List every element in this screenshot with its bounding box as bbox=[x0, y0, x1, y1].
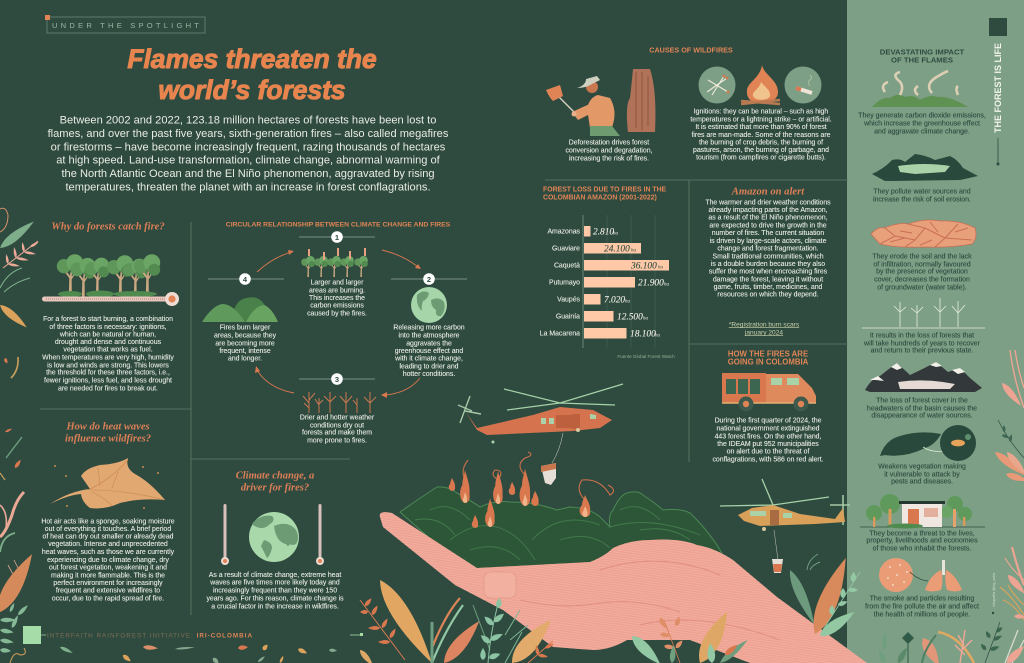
text: amazon on alert: Small traditional communities, which bbox=[712, 253, 824, 260]
text: climate change: increasingly frequent than they were 150 bbox=[213, 588, 337, 594]
text step 1: areas are burning. bbox=[309, 288, 365, 294]
text: amazon on alert: are expected to drive the growth in the bbox=[709, 222, 827, 229]
text: why forests catch fire: of three factors is necessary: ignitions, bbox=[49, 324, 167, 331]
flames and smoke bbox=[449, 452, 614, 528]
bar chart: 7.020 bbox=[604, 296, 625, 306]
text: lives and property: They become a threat to the lives, bbox=[869, 530, 975, 537]
number badge 3: 3 bbox=[335, 375, 339, 384]
text: water sources: increase the risk of soil erosion. bbox=[873, 196, 971, 203]
text: why forests catch fire: is low and winds are strong. This lowers bbox=[47, 362, 169, 369]
icon: particles and lungs bbox=[879, 558, 962, 592]
cycle step 1 bbox=[299, 231, 375, 318]
bar chart: ha bbox=[631, 248, 636, 254]
bar chart: La Macarena bbox=[540, 330, 580, 338]
credit: vertical illustrator note: infografía @ing_sofia bbox=[992, 573, 996, 607]
text step 2: leading to drier and bbox=[400, 363, 459, 370]
section tag: under the spotlight: UNDER THE SPOTLIGHT bbox=[52, 21, 202, 30]
decoration: left lower foliage bbox=[0, 428, 39, 663]
bar chart: 12.500 bbox=[617, 312, 643, 322]
text: amazon on alert: already impacting parts of the Amazon, bbox=[708, 207, 828, 214]
panel: forest is life sidebar bbox=[847, 0, 1024, 663]
text: why forests catch fire: drought and dense and continuous bbox=[55, 339, 162, 346]
bar chart: Guainía bbox=[556, 314, 580, 320]
heading: how the fires are going: HOW THE FIRES ARE bbox=[728, 350, 808, 358]
dividers bbox=[40, 180, 848, 615]
text step 1: Larger and larger bbox=[311, 280, 364, 286]
title: world’s forests bbox=[158, 75, 346, 105]
text: ignitions: temperatures or a lightning strike – or artificial. bbox=[690, 116, 832, 123]
arrow: step 2 to 3 bbox=[381, 378, 420, 398]
text: climate change: As a result of climate change, extreme heat bbox=[209, 572, 341, 579]
text: erode soil: of infiltration, normally favoured bbox=[873, 261, 971, 268]
text: loss of forests: It results in the loss of forests that bbox=[870, 332, 974, 339]
text: why forests catch fire: fewer ignitions, less fuel, and less drought bbox=[44, 377, 172, 384]
text: carbon emissions: They generate carbon dioxide emissions, bbox=[858, 112, 986, 119]
text: climate change: a crucial factor in the increase in wildfires. bbox=[211, 603, 339, 610]
bar chart: Caquetá bbox=[554, 262, 580, 270]
cycle step 3 bbox=[299, 373, 376, 444]
text: erode soil: of groundwater (water table). bbox=[877, 284, 967, 291]
heading: how do heat waves influence wildfires: influence wildfires? bbox=[65, 434, 151, 444]
text: climate change: waves are five times more likely today and bbox=[209, 580, 340, 586]
intro text: or firestorms – have become increasingly frequent, razing thousands of hectares bbox=[51, 141, 446, 153]
text: heat waves: Hot air acts like a sponge, soaking moisture bbox=[41, 518, 175, 525]
text: heat waves: making it more flammable. This is the bbox=[51, 572, 165, 579]
text step 2: into the atmosphere bbox=[399, 332, 460, 340]
text: why forests catch fire: vegetation that works as fuel. bbox=[63, 347, 153, 354]
text: how fires are going: on alert due to the threat of bbox=[727, 448, 809, 455]
icon: dry trees bbox=[303, 392, 376, 413]
icon: matches bbox=[698, 66, 736, 104]
text step 2: hotter conditions. bbox=[403, 371, 455, 378]
arrow: step 4 to 1 bbox=[257, 250, 294, 272]
text: why forests catch fire: For a forest to start burning, a combination bbox=[43, 316, 173, 323]
text step 3: Drier and hotter weather bbox=[300, 414, 375, 421]
text: lives and property: property, livelihoods and economies bbox=[866, 537, 978, 544]
intro text: at high speed. Land-use transformation, climate change, abnormal warming of bbox=[56, 155, 441, 167]
intro text: Between 2002 and 2022, 123.18 million hectares of forests have been lost to bbox=[60, 114, 436, 126]
text: heat waves: of heat can dry out smaller or already dead bbox=[42, 534, 174, 541]
number badge 4: 4 bbox=[243, 275, 248, 284]
icon: cracked earth bbox=[871, 220, 976, 247]
bar chart: 18.100 bbox=[630, 330, 656, 340]
sidebar square marker bbox=[989, 18, 1007, 36]
icon: campfire bbox=[741, 65, 780, 104]
open hand bbox=[380, 512, 867, 663]
heading: causes of wildfires: CAUSES OF WILDFIRES bbox=[649, 46, 733, 54]
text step 4: and longer. bbox=[228, 356, 262, 362]
decoration: panel right edge foliage bbox=[993, 350, 1024, 620]
text: heat waves: heat waves, such as those we are currently bbox=[42, 549, 175, 556]
icon: burning tree line bbox=[301, 248, 368, 277]
bar chart: ha bbox=[625, 300, 630, 304]
text: water disappearance: The loss of forest cover in the bbox=[876, 397, 968, 404]
illustration: rescue helicopter bbox=[458, 384, 623, 485]
text: carbon emissions: and aggravate climate change. bbox=[874, 128, 970, 135]
illustration: forest held on a hand bbox=[380, 452, 867, 663]
icon: bushes bbox=[202, 297, 278, 322]
icon: leaf and pest bbox=[880, 425, 976, 461]
text: ignitions: tourism (from campfires or cigarette butts). bbox=[696, 154, 826, 161]
sidebar heading: DEVASTATING IMPACT bbox=[880, 48, 965, 56]
text: lives and property: of those who inhabit the forests. bbox=[873, 545, 971, 552]
text: amazon on alert: damage the forest, leaving it without bbox=[713, 276, 823, 283]
text: amazon on alert: as a result of the El Niño phenomenon, bbox=[708, 215, 828, 222]
text: heat waves: perfect environment for increasingly bbox=[53, 580, 163, 587]
heading: forest loss chart: COLOMBIAN AMAZON (2001-2022) bbox=[543, 194, 657, 202]
text: heat waves: frequent and extensive wildfires to bbox=[56, 588, 160, 595]
bar chart: ha bbox=[664, 282, 670, 288]
bar chart: ha bbox=[613, 232, 618, 236]
text: why forests catch fire: which can be natural or human, bbox=[59, 331, 156, 338]
text step 4: Fires burn larger bbox=[220, 324, 271, 332]
text step 4: are becoming more bbox=[215, 340, 275, 347]
title: Flames threaten the bbox=[127, 44, 377, 74]
icon: earth bbox=[411, 287, 447, 323]
text: why forests catch fire: When temperatures are very high, humidity bbox=[42, 354, 174, 361]
text: ignitions: It is estimated that more than 90% of forest bbox=[695, 124, 827, 131]
text: amazon on alert: number of fires. The current situation bbox=[712, 230, 824, 237]
bar chart: Amazonas bbox=[547, 228, 581, 236]
text: why forests catch fire: the threshold for these three factors, i.e., bbox=[46, 370, 170, 377]
decoration: bottom centre foliage bbox=[358, 575, 664, 663]
text: loss of forests: and return to their previous state. bbox=[871, 347, 973, 354]
text: deforestation: Deforestation drives forest bbox=[569, 139, 649, 146]
bar chart: 36.100 bbox=[630, 262, 657, 272]
text: how fires are going: During the first quarter of 2024, the bbox=[715, 417, 822, 424]
icon: house among trees bbox=[860, 494, 985, 528]
text step 3: forests and make them bbox=[302, 429, 372, 436]
text: ignitions: pastures, arson, the burning of garbage, and bbox=[693, 147, 829, 154]
text: ignitions: the burning of crop debris, the burning of bbox=[699, 139, 823, 146]
text step 1: caused by the fires. bbox=[307, 310, 367, 318]
text: heat waves: occur, due to the rapid spread of fire. bbox=[52, 595, 164, 602]
icon: smoking hills bbox=[872, 71, 968, 107]
text: how fires are going: national government extinguished bbox=[716, 425, 820, 432]
note: registration burn scars: january 2024 bbox=[744, 329, 783, 336]
text: amazon on alert: The warmer and drier weather conditions bbox=[705, 199, 831, 206]
cycle step 4 bbox=[202, 273, 284, 362]
number badge 2: 2 bbox=[427, 275, 431, 284]
heading: climate change a driver: Climate change, a bbox=[236, 470, 314, 482]
text step 4: areas, because they bbox=[214, 332, 277, 340]
heading: amazon on alert: Amazon on alert bbox=[731, 186, 805, 198]
icon: earth between thermometers bbox=[221, 504, 324, 565]
text step 4: frequent, intense bbox=[219, 348, 271, 355]
text: heat waves: vegetation. Intense and unprecedented bbox=[48, 541, 168, 548]
icon: hills and polluted water bbox=[872, 154, 978, 181]
icon: snowy mountains bbox=[865, 362, 982, 392]
text: why forests catch fire: are needed for fires to break out. bbox=[58, 385, 158, 392]
text: loss of forests: will take hundreds of years to recover bbox=[863, 340, 981, 347]
icon: cigarette bbox=[784, 66, 822, 104]
text: erode soil: They erode the soil and the lack bbox=[872, 253, 972, 260]
bar chart: 2.810 bbox=[593, 228, 614, 238]
footer: initiative label bbox=[23, 626, 363, 644]
bar chart: ha bbox=[643, 316, 648, 322]
bar chart: Guaviare bbox=[552, 246, 580, 252]
intro text: the North Atlantic Ocean and the El Niño phenomenon, aggravated by rising bbox=[61, 168, 435, 180]
chart source: Fuente Global Forest Watch bbox=[617, 354, 675, 359]
number badge 1: 1 bbox=[335, 233, 339, 242]
arrow: step 3 to 4 bbox=[255, 366, 294, 393]
bar chart: 21.900 bbox=[638, 278, 664, 288]
text: erode soil: cover, decreases the formation bbox=[874, 276, 970, 283]
text step 1: This increases the bbox=[309, 295, 365, 302]
text: smoke and health: the health of millions of people. bbox=[874, 611, 970, 618]
text: amazon on alert: is a double burden because they also bbox=[711, 261, 825, 268]
sidebar heading: OF THE FLAMES bbox=[891, 56, 953, 64]
heading: how the fires are going: GOING IN COLOMBIA bbox=[728, 358, 809, 366]
text step 2: Releasing more carbon bbox=[393, 324, 465, 332]
text: amazon on alert: game, fruits, timber, medicines, and bbox=[714, 284, 823, 291]
thumb nail bbox=[484, 572, 516, 598]
text: pests: it vulnerable to attack by bbox=[884, 471, 960, 478]
text step 2: aggravates the bbox=[406, 340, 452, 347]
text: smoke and health: The smoke and particles resulting bbox=[870, 595, 974, 602]
sidebar vertical title: THE FOREST IS LIFE bbox=[993, 43, 1003, 133]
text: ignitions: Ignitions: they can be natural – such as high bbox=[694, 108, 828, 115]
icon: fire truck bbox=[722, 373, 816, 412]
text: climate change: years ago. For this reason, climate change is bbox=[206, 596, 344, 602]
note: registration burn scars: *Registration burn scars bbox=[729, 321, 800, 328]
text: heat waves: out forest vegetation, weakening it and bbox=[49, 564, 167, 571]
text: amazon on alert: is driven by large-scale actors, climate bbox=[710, 238, 827, 245]
text: amazon on alert: resources on which they depend. bbox=[717, 292, 819, 299]
text: amazon on alert: change and forest fragmentation. bbox=[717, 246, 819, 253]
text step 3: conditions dry out bbox=[310, 422, 364, 429]
heading: how do heat waves influence wildfires: How do heat waves bbox=[65, 422, 150, 432]
text: deforestation: conversion and degradation, bbox=[566, 147, 653, 154]
bar chart: Putumayo bbox=[549, 280, 580, 286]
decoration: left upper foliage bbox=[0, 208, 39, 378]
text: water disappearance: headwaters of the basin causes the bbox=[867, 405, 977, 412]
icon: dry saplings bbox=[862, 298, 985, 328]
text: deforestation: increasing the risk of fires. bbox=[569, 155, 649, 162]
footer: initiative label: INTERFAITH RAINFOREST INITIATIVE: IRI-COLOMBIA bbox=[47, 632, 253, 640]
bar chart: 24.100 bbox=[604, 244, 630, 254]
text: how fires are going: 443 forest fires. On the other hand, bbox=[715, 433, 822, 440]
section tag: under the spotlight bbox=[45, 15, 205, 33]
cycle step 2 bbox=[391, 273, 467, 378]
text: water disappearance: disappearance of water sources. bbox=[871, 412, 973, 419]
text step 2: greenhouse effect and bbox=[395, 348, 463, 355]
heading: forest loss chart: FOREST LOSS DUE TO FIRES IN THE bbox=[543, 186, 667, 194]
decoration: panel bottom foliage bbox=[877, 622, 1024, 663]
text step 3: more prone to fires. bbox=[307, 437, 367, 444]
intro text: temperatures, threaten the planet with an increase in forest conflagrations. bbox=[65, 182, 431, 194]
text: erode soil: by the presence of vegetation bbox=[876, 268, 968, 275]
heading: climate change a driver: driver for fires? bbox=[241, 482, 309, 494]
bar chart: Vaupés bbox=[557, 296, 581, 304]
text: ignitions: fires are man-made. Some of the reasons are bbox=[691, 132, 831, 139]
icon: trees over thermometer bbox=[42, 254, 179, 306]
heading: why do forests catch fire: Why do forests catch fire? bbox=[51, 222, 165, 232]
text: pests: pests and diseases. bbox=[891, 478, 953, 485]
text: heat waves: experiencing due to climate change, dry bbox=[47, 557, 169, 564]
text: amazon on alert: suffer the most when encroaching fires bbox=[709, 269, 828, 276]
text: heat waves: out of everything it touches. A brief period bbox=[45, 526, 171, 533]
heading: circular relationship: CIRCULAR RELATIONSHIP BETWEEN CLIMATE CHANGE AND FIRES bbox=[226, 222, 451, 228]
forest hills bbox=[400, 487, 722, 580]
intro text: flames, and over the past five years, sixth-generation fires – also called megafires bbox=[48, 128, 449, 140]
icon: man with axe and tree bbox=[546, 69, 655, 136]
text step 2: with it climate change, bbox=[394, 356, 463, 362]
bar chart bbox=[540, 215, 670, 348]
icon: dry leaf bbox=[50, 458, 165, 509]
bar chart: ha bbox=[655, 334, 660, 338]
text: how fires are going: the IDEAM put 952 municipalities bbox=[717, 441, 819, 448]
arrow: step 1 to 2 bbox=[382, 250, 421, 269]
text: carbon emissions: which increase the greenhouse effect bbox=[863, 120, 980, 127]
text: water sources: They pollute water sources and bbox=[873, 188, 971, 195]
text: pests: Weakens vegetation making bbox=[878, 463, 966, 470]
bar chart: ha bbox=[658, 266, 664, 270]
decoration: scattered leaves along the footer bbox=[59, 643, 337, 663]
text: smoke and health: from the fire pollute the air and affect bbox=[865, 603, 979, 610]
decoration: bottom right foliage bbox=[658, 554, 860, 663]
text step 1: carbon emissions bbox=[310, 302, 364, 310]
illustration: second helicopter bbox=[720, 479, 850, 573]
text: how fires are going: conflagrations, with 586 on red alert. bbox=[712, 456, 824, 463]
